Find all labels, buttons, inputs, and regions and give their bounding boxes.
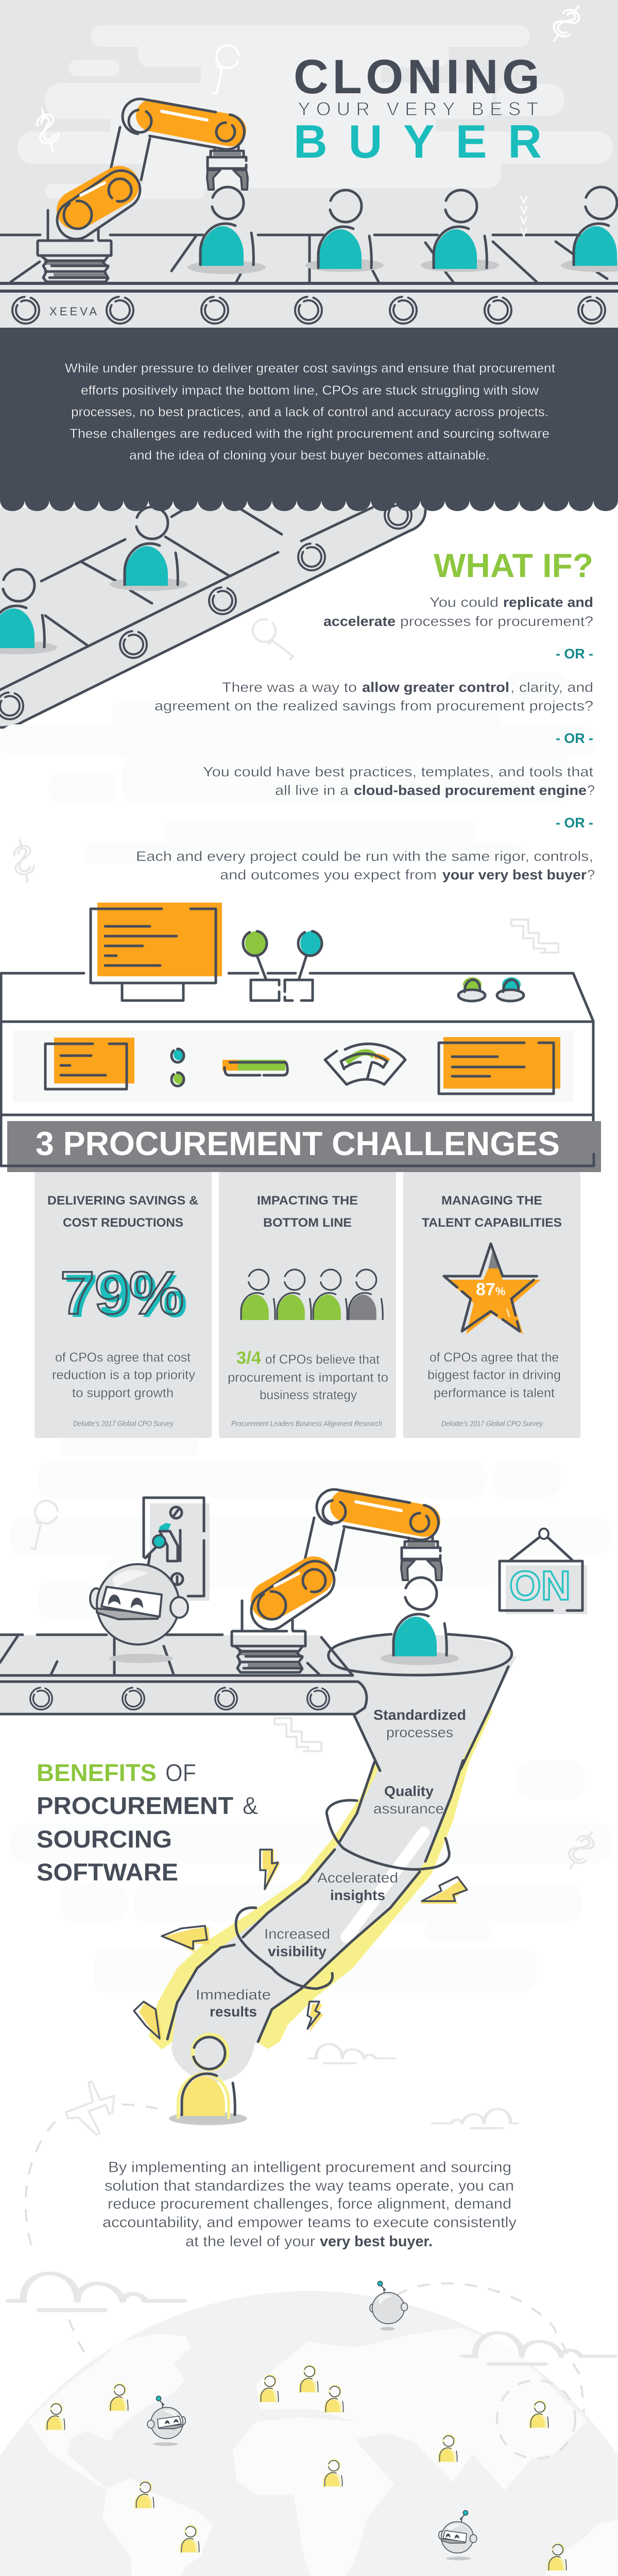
- card: impacting the bottom line: IMPACTING THE: [257, 1194, 358, 1208]
- closing paragraph: By implementing an intelligent procurement and sourcing: [108, 2159, 511, 2176]
- icon: star 87%: [444, 1244, 541, 1334]
- benefits heading: PROCUREMENT: [37, 1792, 233, 1819]
- faint clouds: benefits: [10, 1438, 612, 1992]
- card: delivering savings: of CPOs agree that cost: [55, 1350, 191, 1365]
- card: managing talent: TALENT CAPABILITIES: [422, 1216, 562, 1230]
- card: delivering savings: COST REDUCTIONS: [63, 1216, 183, 1230]
- what if list: You could: [430, 595, 499, 610]
- what if list: - OR -: [556, 815, 593, 831]
- what if list: your very best buyer: [442, 867, 587, 883]
- card: delivering savings: Deloitte's 2017 Global CPO Survey: [73, 1419, 174, 1428]
- conveyor belt: header: [0, 235, 618, 324]
- machine console: [0, 903, 593, 1166]
- closing paragraph: solution that standardizes the way teams operate, you can: [105, 2178, 514, 2194]
- funnel labels: visibility: [268, 1943, 327, 1959]
- intro text: While under pressure to deliver greater cost savings and ensure that procurement: [65, 361, 555, 376]
- icon: cloud right: [463, 2333, 614, 2364]
- icon: dollar sign faint: [11, 838, 37, 883]
- africa: [233, 2417, 394, 2576]
- what if list: You could have best practices, templates, and tools that: [203, 764, 594, 779]
- what if list: There was a way to: [222, 680, 357, 695]
- card: managing talent: performance is talent: [434, 1386, 555, 1400]
- icon: airplane: [66, 2081, 114, 2135]
- stat: 79%: 79%: [60, 1259, 184, 1327]
- funnel labels: Increased: [264, 1926, 330, 1942]
- eurasia: [256, 2328, 587, 2490]
- icons: lightning bolts: [134, 1850, 467, 2040]
- title: [294, 49, 542, 168]
- left screen: [45, 1038, 134, 1089]
- map robots: [147, 2281, 477, 2560]
- gauge: [325, 1044, 405, 1084]
- icon: four people: [241, 1269, 383, 1320]
- buyer in funnel: [381, 1578, 459, 1665]
- panel: dark intro band: [0, 328, 618, 511]
- benefits heading: [37, 1759, 258, 1886]
- funnel outline: [167, 1667, 508, 2042]
- yellow buyer: [169, 2035, 247, 2125]
- what if heading: WHAT IF?: [434, 547, 593, 584]
- benefits heading: OF: [165, 1759, 196, 1786]
- funnel body: [171, 1656, 517, 2082]
- card: managing talent: [403, 1172, 580, 1438]
- card: managing talent: biggest factor in driving: [427, 1368, 561, 1382]
- monitor: [91, 903, 222, 1001]
- title: BUYER: [294, 116, 542, 168]
- control panel: [13, 1030, 573, 1102]
- what if list: cloud-based procurement engine: [354, 783, 587, 798]
- what if list: agreement on the realized savings from procurement projects?: [154, 698, 593, 714]
- icon: dollar sign left: [33, 107, 62, 152]
- funnel labels: assurance: [373, 1801, 444, 1817]
- card: managing talent: MANAGING THE: [441, 1194, 542, 1208]
- south america: [102, 2478, 213, 2576]
- sign: ON: ON: [509, 1563, 571, 1608]
- faint background clouds: what if: [0, 672, 595, 863]
- levers: [243, 931, 323, 1001]
- closing paragraph: accountability, and empower teams to execute consistently: [102, 2214, 517, 2231]
- intro text: and the idea of cloning your best buyer becomes attainable.: [129, 448, 490, 463]
- card: impacting the bottom line: Procurement Leaders Business Alignment Research: [231, 1419, 382, 1428]
- card: impacting the bottom line: 3/4: [236, 1348, 261, 1368]
- flight path dashes: [26, 2105, 585, 2576]
- what if list: [136, 595, 595, 883]
- closing paragraph: [102, 2159, 517, 2250]
- what if list: - OR -: [556, 731, 593, 746]
- what if list: accelerate: [323, 614, 396, 629]
- funnel labels: [196, 1707, 466, 2020]
- icon: zigzag faint: [274, 1718, 321, 1751]
- flight circle dashes: [497, 2380, 575, 2459]
- banner: 3 procurement challenges: 3 PROCUREMENT CHALLENGES: [36, 1125, 560, 1162]
- what if list: Each and every project could be run with the same rigor, controls,: [136, 849, 593, 864]
- icon: cloud: [309, 2044, 394, 2063]
- title: YOUR VERY BEST: [298, 98, 538, 120]
- panel: diagonal conveyor: [0, 502, 425, 727]
- title: CLONING: [294, 49, 540, 104]
- right screen: [439, 1037, 560, 1094]
- intro text: efforts positively impact the bottom line, CPOs are stuck struggling with slow: [81, 383, 539, 398]
- intro text: processes, no best practices, and a lack of control and accuracy across projects.: [71, 405, 548, 419]
- card: delivering savings: to support growth: [72, 1386, 174, 1400]
- icon: magnifier: [253, 619, 293, 659]
- what if list: allow greater control: [362, 680, 509, 695]
- closing paragraph: at the level of your: [185, 2233, 315, 2250]
- icon: key: [197, 42, 250, 95]
- cloned buyers on header conveyor: [187, 187, 618, 274]
- closing paragraph: reduce procurement challenges, force alignment, demand: [108, 2196, 511, 2212]
- what if list: ?: [587, 867, 595, 883]
- card: delivering savings: DELIVERING SAVINGS &: [47, 1194, 198, 1208]
- what if list: processes for procurement?: [400, 614, 593, 629]
- intro text: These challenges are reduced with the right procurement and sourcing software: [70, 427, 550, 441]
- buttons: [458, 977, 524, 1001]
- funnel labels: Accelerated: [317, 1870, 398, 1886]
- what if list: ?: [587, 783, 595, 798]
- indicator dots: [171, 1049, 185, 1086]
- icon: dollar faint: [562, 1827, 600, 1873]
- robot head on conveyor: [90, 1535, 188, 1663]
- intro text: [65, 361, 555, 463]
- card: managing talent: of CPOs agree that the: [430, 1350, 559, 1365]
- what if list: replicate and: [503, 595, 593, 610]
- conveyor belt: header: XEEVA: [49, 305, 97, 318]
- card: impacting the bottom line: [219, 1172, 396, 1438]
- funnel highlight: [347, 1833, 424, 1937]
- funnel labels: Standardized: [373, 1707, 466, 1723]
- icon: cloud mirrored: [433, 2109, 518, 2128]
- machine housing lines: [0, 973, 593, 1166]
- sign: ON: [500, 1529, 587, 1614]
- benefits heading: &: [243, 1792, 258, 1819]
- icon: dollar sign top right: [546, 1, 586, 46]
- what if list: , clarity, and: [510, 680, 593, 695]
- icon: zigzag: [511, 920, 558, 953]
- what if list: - OR -: [556, 646, 593, 662]
- funnel labels: insights: [330, 1887, 385, 1903]
- card: managing talent: Deloitte's 2017 Global CPO Survey: [441, 1419, 543, 1428]
- stat: 79%: 79%: [64, 1262, 187, 1330]
- banner: 3 procurement challenges: [1, 1121, 601, 1172]
- wall switch: [144, 1498, 210, 1601]
- card: delivering savings: [35, 1172, 212, 1438]
- icon: down chevrons: [521, 196, 527, 236]
- progress bar: [222, 1060, 287, 1075]
- what if list: and outcomes you expect from: [220, 867, 437, 883]
- funnel labels: Quality: [384, 1783, 434, 1799]
- conveyor belt: benefits: [0, 1635, 367, 1714]
- closing paragraph: very best buyer.: [320, 2233, 433, 2250]
- benefits heading: SOFTWARE: [37, 1858, 178, 1886]
- card: impacting the bottom line: of CPOs believe that: [265, 1352, 380, 1367]
- icon: key faint: [15, 1497, 69, 1550]
- funnel labels: processes: [386, 1724, 453, 1740]
- header background: [0, 0, 618, 330]
- what if list: all live in a: [275, 783, 349, 798]
- funnel labels: results: [210, 2004, 257, 2020]
- card: impacting the bottom line: BOTTOM LINE: [263, 1216, 352, 1230]
- north america: [28, 2334, 191, 2488]
- funnel yellow glow: [149, 1710, 493, 2049]
- benefits heading: SOURCING: [37, 1825, 172, 1853]
- icon: star 87%: 87%: [476, 1280, 505, 1299]
- funnel labels: Immediate: [196, 1987, 271, 2003]
- world map: [0, 2291, 618, 2576]
- conveyor details: benefits: [0, 1635, 367, 1714]
- icon: cloud left: [9, 2274, 184, 2310]
- card: impacting the bottom line: procurement is important to: [228, 1370, 388, 1385]
- card: delivering savings: reduction is a top priority: [52, 1368, 196, 1382]
- robotic arm: benefits: [232, 1487, 442, 1672]
- card: impacting the bottom line: business strategy: [260, 1388, 357, 1402]
- map people: [46, 2365, 566, 2571]
- robotic arm: header: [38, 96, 248, 282]
- benefits heading: BENEFITS: [37, 1759, 157, 1786]
- funnel: [149, 1634, 517, 2082]
- australia and islands: [540, 2519, 618, 2576]
